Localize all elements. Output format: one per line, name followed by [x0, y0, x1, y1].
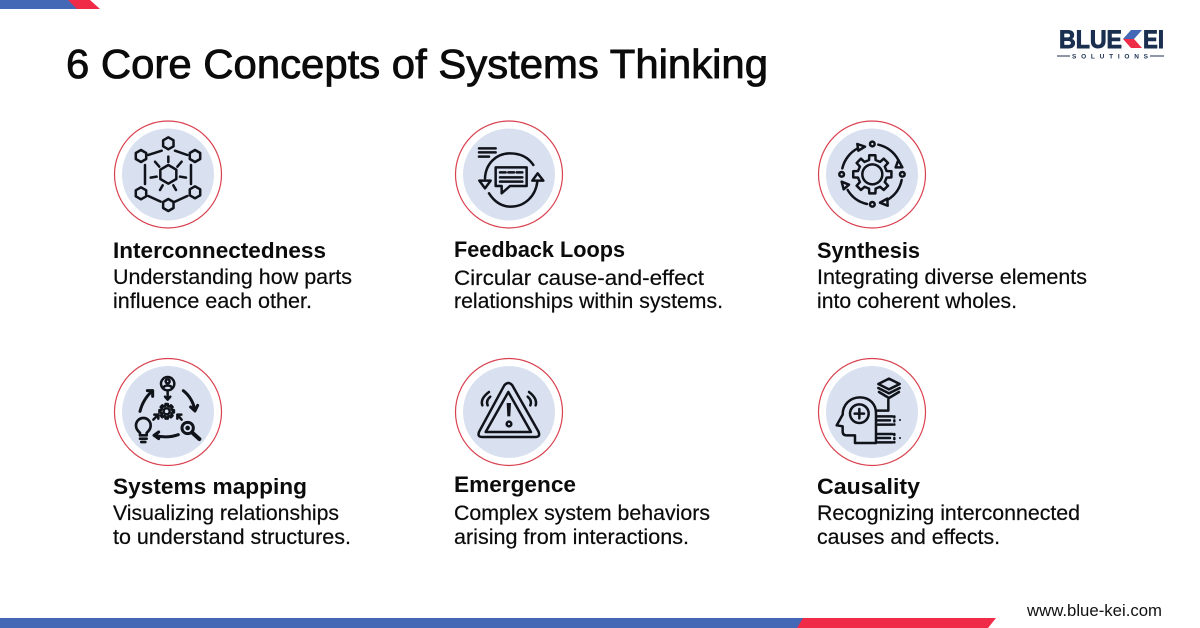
- icon: process cycle with person, gear, magnifier and bulb: [114, 358, 222, 466]
- top accent bar: [0, 0, 100, 9]
- description: [817, 502, 1080, 549]
- heading: Feedback Loops: [454, 237, 625, 262]
- description: arising from interactions.: [454, 526, 689, 549]
- description: [113, 502, 351, 549]
- heading: Interconnectedness: [113, 238, 326, 263]
- description: Visualizing relationships: [113, 502, 339, 525]
- description: influence each other.: [113, 290, 312, 313]
- heading: Causality: [817, 474, 920, 499]
- heading: Synthesis: [817, 238, 920, 263]
- heading: Emergence: [454, 472, 576, 497]
- description: [817, 266, 1087, 313]
- description: relationships within systems.: [454, 290, 723, 313]
- heading: Systems mapping: [113, 474, 307, 499]
- panel: Causality: [817, 358, 1080, 549]
- description: Understanding how parts: [113, 266, 352, 289]
- logo: Blue Kei Solutions: EI: [1143, 26, 1164, 54]
- icon: head with target and stacked layers: [818, 358, 926, 466]
- description: Complex system behaviors: [454, 502, 710, 525]
- icon: speech bubble in feedback loop: [456, 121, 562, 228]
- bottom accent bar: [0, 618, 996, 628]
- description: [454, 267, 723, 313]
- icon: warning triangle with signal waves: [456, 358, 562, 466]
- description: Circular cause-and-effect: [454, 267, 704, 290]
- website url: www.blue-kei.com: [1026, 602, 1162, 620]
- icon: connected hexagon network: [114, 121, 222, 228]
- panel: Emergence: [454, 358, 710, 549]
- description: [454, 502, 710, 549]
- logo: Blue Kei Solutions: SOLUTIONS: [1072, 54, 1149, 60]
- logo: Blue Kei Solutions: [1057, 26, 1164, 60]
- logo: Blue Kei Solutions: BLUE: [1059, 26, 1122, 54]
- description: Recognizing interconnected: [817, 502, 1080, 525]
- title: 6 Core Concepts of Systems Thinking: [66, 41, 768, 87]
- panel: Feedback Loops: [454, 121, 723, 313]
- description: to understand structures.: [113, 526, 351, 549]
- panel: Interconnectedness: [113, 121, 352, 313]
- panel: Synthesis: [817, 121, 1087, 313]
- description: Integrating diverse elements: [817, 266, 1087, 289]
- description: causes and effects.: [817, 526, 1000, 549]
- description: into coherent wholes.: [817, 290, 1017, 313]
- icon: gear with circular arrows: [818, 121, 926, 228]
- description: [113, 266, 352, 313]
- panel: Systems mapping: [113, 358, 351, 549]
